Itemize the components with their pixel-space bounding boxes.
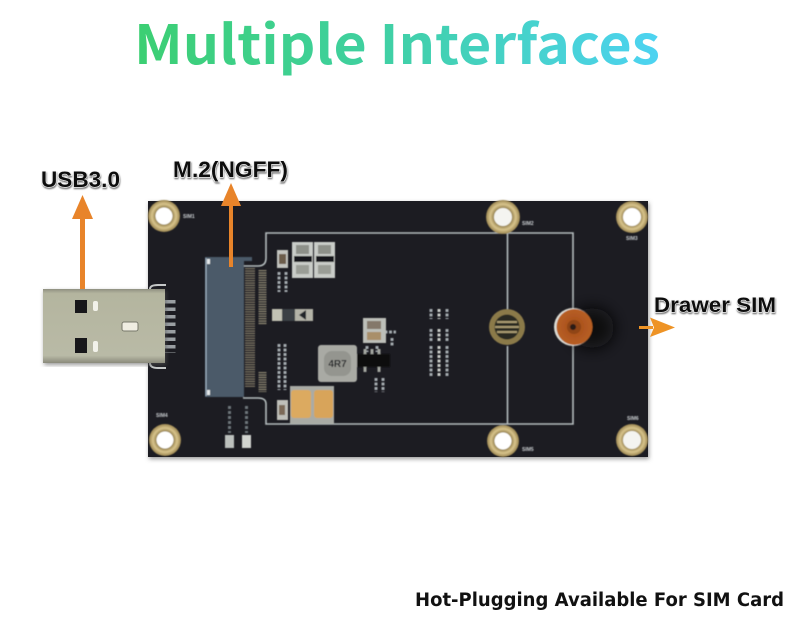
silkscreen labels: SIM5	[522, 447, 534, 453]
label: USB3.0: USB3.0	[41, 167, 120, 192]
silkscreen labels: SIM3	[626, 236, 638, 242]
inductor	[318, 345, 357, 382]
arrow: M.2	[221, 183, 241, 267]
white SMD pads top	[277, 242, 335, 278]
USB shell	[43, 289, 165, 363]
board body	[148, 201, 648, 457]
silkscreen labels: SIM6	[627, 416, 639, 422]
small pad clusters	[279, 272, 447, 392]
USB holes	[75, 300, 138, 353]
arrow: Drawer SIM	[639, 318, 675, 337]
diode	[272, 309, 313, 321]
M.2 slot	[205, 257, 262, 397]
drawer SIM copper post	[554, 308, 614, 348]
LEDs	[225, 406, 251, 448]
label: Drawer SIM: Drawer SIM	[654, 294, 776, 317]
USB connector	[43, 285, 169, 368]
silkscreen labels	[156, 214, 639, 453]
regulator IC	[357, 318, 390, 372]
title: Multiple Interfaces	[134, 1, 660, 80]
white outline traces	[243, 233, 573, 424]
tantalum capacitors	[277, 386, 334, 424]
PCB board	[148, 200, 648, 457]
inductor: 4R7	[328, 359, 347, 370]
silkscreen labels: SIM2	[522, 221, 534, 227]
arrow: USB3.0	[72, 195, 93, 289]
board details	[148, 200, 648, 457]
label: M.2(NGFF): M.2(NGFF)	[173, 157, 288, 182]
USB pins	[162, 300, 176, 353]
silkscreen labels: SIM1	[183, 214, 195, 220]
SIM via	[489, 309, 525, 345]
silkscreen labels: SIM4	[156, 413, 168, 419]
mounting holes	[148, 200, 648, 457]
footnote: Hot-Plugging Available For SIM Card	[415, 590, 784, 611]
USB tabs	[150, 285, 166, 368]
